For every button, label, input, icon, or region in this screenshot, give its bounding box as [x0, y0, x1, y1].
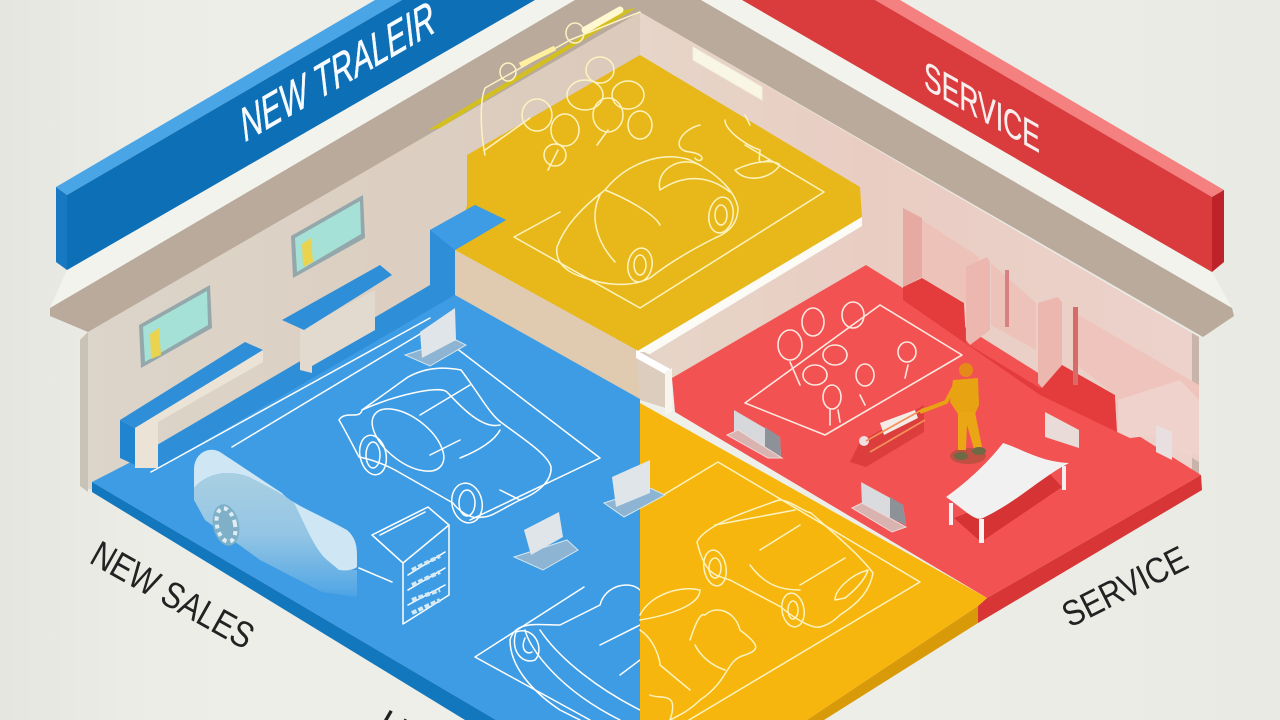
- person figure: [920, 363, 986, 464]
- front wall below yellow floor: [455, 250, 640, 400]
- wheel: [209, 502, 243, 548]
- server rack sketch: [372, 507, 449, 624]
- car sketch: back room: [557, 157, 738, 284]
- radiator stand 3: [604, 460, 665, 517]
- right wall end: [1192, 333, 1199, 478]
- parking outline: [660, 462, 920, 720]
- sign board white: [693, 47, 762, 100]
- table sketch with chairs: [745, 302, 962, 435]
- wall shelf 2: [282, 265, 392, 373]
- white table: [946, 443, 1069, 543]
- callout markers: [500, 10, 620, 81]
- car sketch: lower: [510, 585, 640, 720]
- laptop 2: [852, 482, 906, 532]
- right wall: [640, 12, 1199, 480]
- bench with shadow: [850, 405, 925, 467]
- floor: red service room: [672, 208, 1202, 623]
- parking outline: lower car: [475, 587, 590, 720]
- radiator stand 1: [405, 308, 466, 366]
- sign label: service: SERVICE: [924, 53, 1040, 162]
- roof band: [50, 0, 1234, 337]
- floor: yellow front room: [604, 403, 987, 720]
- blue floor edge: [92, 482, 496, 720]
- glass car block: [194, 450, 357, 597]
- floor: blue main room: [92, 195, 640, 720]
- left wall: [80, 12, 640, 490]
- car sketch: main: [339, 368, 551, 526]
- label: new sales: NEW SALES: [84, 533, 261, 657]
- white ledge behind signs: [50, 0, 1232, 308]
- doodle sketches: [640, 589, 756, 720]
- radiator stand 2: [514, 512, 578, 570]
- sign: new trailer: [56, 0, 535, 270]
- white floor rim: [636, 217, 862, 354]
- parking outline: [514, 145, 824, 308]
- wall panel: [1045, 412, 1079, 448]
- floor: yellow back room: [455, 10, 862, 400]
- sign: service: [742, 0, 1224, 272]
- laptop 1: [727, 410, 782, 458]
- squiggle sketch: [679, 115, 780, 178]
- label: service: SERVICE: [1055, 538, 1194, 635]
- blue baseboard wall: [155, 205, 506, 470]
- yellow floor edge: [807, 606, 978, 720]
- monitor right: [291, 195, 365, 278]
- monitor left: [139, 285, 212, 368]
- red floor edge: [978, 475, 1202, 623]
- car sketch: front room: [697, 500, 873, 629]
- olive ledge strip: [428, 8, 636, 130]
- doors on wall: [903, 208, 1199, 462]
- corner pier: [636, 217, 862, 415]
- parking outline: [232, 328, 600, 520]
- wall shadow strip: [80, 332, 88, 492]
- wall shelf: [120, 342, 263, 468]
- people sketches: [481, 12, 652, 170]
